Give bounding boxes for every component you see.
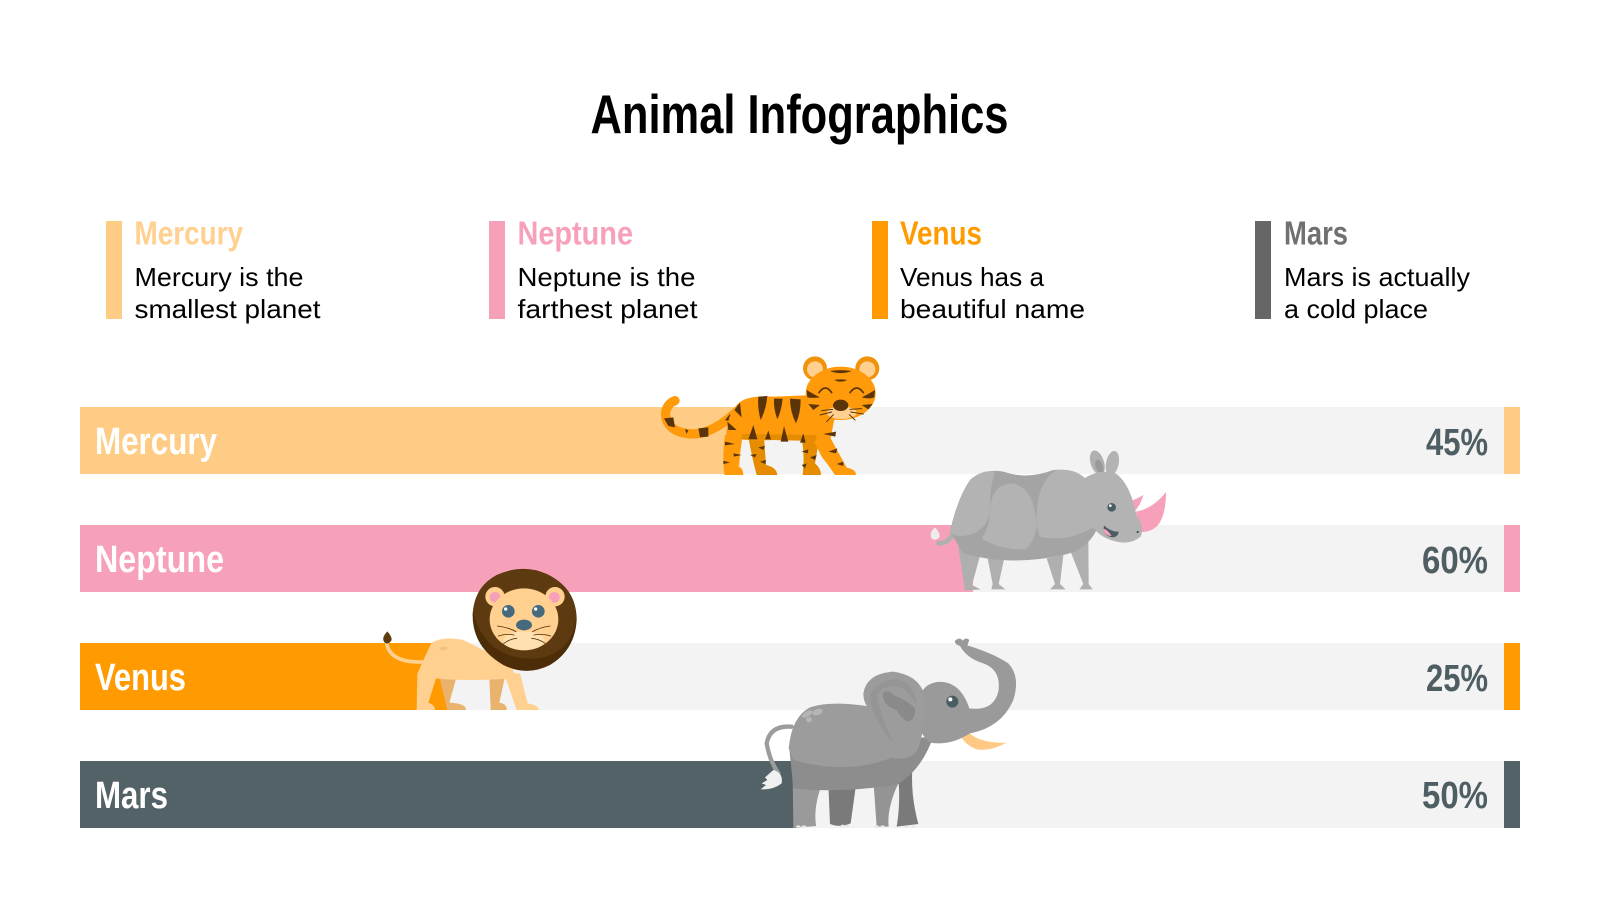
legend: Venus: beautiful name [900,294,1085,324]
bar: Venus 25% [80,643,1520,710]
legend: Mars: a cold place [1284,294,1428,324]
legend: Mercury [106,214,321,324]
legend: Mars: Mars [1284,214,1348,252]
legend: Venus [872,214,1085,324]
bar: Neptune 60% [80,525,1520,592]
bar: Mars 50%: 50% [1422,775,1488,817]
title: Animal Infographics [590,83,1008,145]
bar: Mars 50%: Mars [95,775,168,817]
bar: Mercury 45%: Mercury [95,421,217,463]
bar: Neptune 60%: Neptune [95,539,224,581]
bar: Venus 25%: 25% [1426,658,1488,700]
icon: lion [383,569,577,710]
icon: elephant [761,638,1016,828]
bar: Venus 25%: Venus [95,657,186,699]
legend: Venus: Venus [900,214,982,252]
icon: tiger [664,356,879,475]
legend: Mercury: Mercury [134,214,244,252]
bar: Neptune 60%: 60% [1422,540,1488,582]
legend: Neptune [489,214,698,324]
legend: Neptune: Neptune [518,214,633,252]
icon: rhino [931,449,1166,591]
legend: Neptune: Neptune is the [518,262,696,292]
legend: Mercury: Mercury is the [134,262,304,292]
legend: Mars: Mars is actually [1284,262,1470,292]
bar: Mercury 45% [80,407,1520,474]
legend: Venus: Venus has a [900,262,1045,292]
legend: Mars [1255,214,1470,324]
legend: Neptune: farthest planet [518,294,698,324]
bar: Mars 50% [80,761,1520,828]
legend: Mercury: smallest planet [134,294,321,324]
bar: Mercury 45%: 45% [1426,422,1488,464]
